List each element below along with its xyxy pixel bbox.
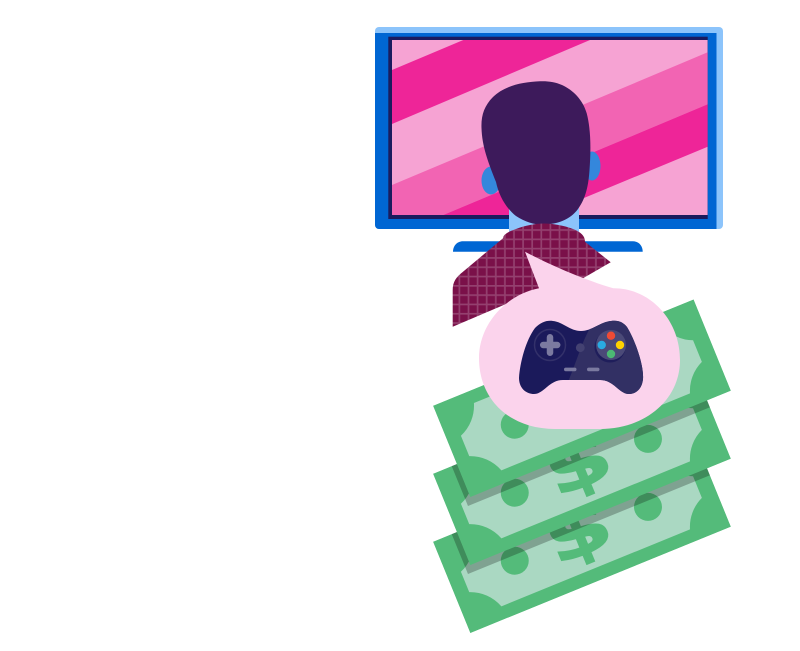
screen with stripes <box>392 40 708 215</box>
monitor highlight edge <box>375 27 723 229</box>
monitor body <box>375 33 716 229</box>
d-pad <box>543 337 557 353</box>
bottom bill: $ <box>532 482 624 581</box>
yellow button <box>616 341 624 349</box>
left ear <box>482 166 500 194</box>
d-pad ring <box>534 330 566 360</box>
top bill <box>433 299 731 497</box>
button plate shadow <box>594 332 626 362</box>
red button <box>607 332 615 340</box>
stack of dollar bills <box>433 300 731 633</box>
plaid shirt <box>453 224 611 327</box>
monitor <box>375 27 723 252</box>
controller body <box>519 321 643 394</box>
controller light side <box>569 320 644 394</box>
bottom bill <box>433 468 731 633</box>
middle bill: $ <box>532 414 624 513</box>
neck <box>509 190 579 234</box>
center button <box>576 343 585 352</box>
screen bezel <box>388 37 708 219</box>
speech bubble <box>479 252 680 429</box>
green button <box>607 350 615 358</box>
select button <box>564 368 576 371</box>
right ear <box>584 152 600 180</box>
person <box>453 81 611 327</box>
monitor stand <box>453 241 643 252</box>
head <box>481 81 590 225</box>
middle bill <box>433 400 731 565</box>
start button <box>587 368 600 371</box>
button plate <box>596 330 626 360</box>
blue button <box>598 341 606 349</box>
icon: game controller <box>519 320 644 394</box>
